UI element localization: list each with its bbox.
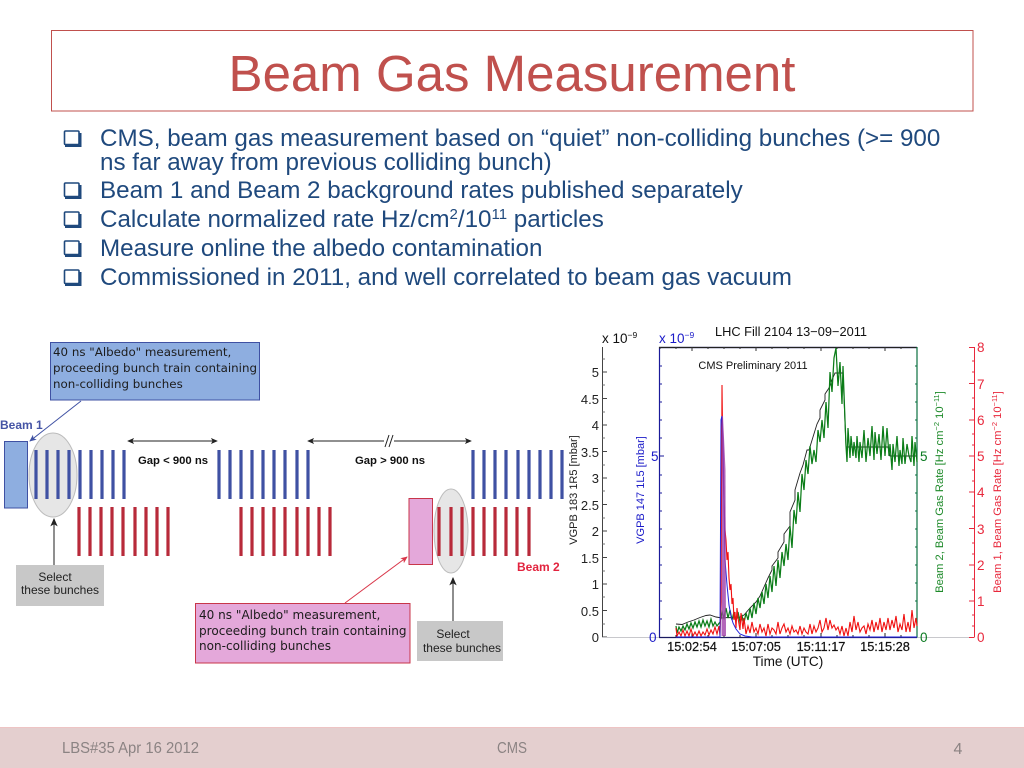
select box beam 2: [417, 621, 503, 661]
gap label over 900 ns: Gap > 900 ns: [355, 455, 425, 467]
bullet: normalized rate: 11: [491, 206, 507, 223]
gap arrow under 900 ns: [128, 440, 217, 442]
green axis labels: 10: [934, 406, 946, 422]
left axis: VGPB 183 1R5: 0.5: [581, 604, 599, 619]
green axis labels: −2: [932, 422, 941, 431]
green axis labels: Beam 2, Beam Gas Rate [Hz cm: [934, 431, 946, 593]
beam 2 albedo callout: 40 ns "Albedo" measurement,: [199, 608, 380, 622]
beam 2 bunches: [79, 507, 529, 556]
green axis labels: ]: [934, 391, 946, 394]
left axis: VGPB 183 1R5: [568, 330, 637, 645]
right axis: beam 1 rate: −11: [990, 394, 999, 406]
trace: red beam 1 rate: [676, 385, 917, 636]
beam 1 block: [4, 442, 28, 508]
footer band: 4: [954, 741, 963, 758]
trace: blue VGPB 147: [676, 416, 917, 637]
blue axis labels: −9: [685, 330, 694, 340]
time axis labels: 15:07:05: [731, 639, 781, 654]
bullet: commissioned: Commissioned in 2011, and well correlated to beam gas vacuum: [100, 264, 792, 291]
bullet list: [64, 125, 940, 291]
arrow: select beam 2 bunches: [452, 578, 454, 621]
bullet: quiet bunches: [64, 125, 940, 176]
right axis: beam 1 rate: 2: [977, 558, 985, 573]
bullet: normalized rate: Calculate normalized rate Hz/cm: [100, 206, 450, 233]
select box beam 2: these bunches: [423, 641, 501, 655]
annotation: CMS preliminary: CMS Preliminary 2011: [698, 360, 808, 372]
select box beam 2: Select: [436, 627, 470, 641]
right axis: beam 1 rate: 3: [977, 522, 985, 537]
beam 1 albedo callout: proceeding bunch train containing: [53, 361, 257, 375]
right axis: beam 1 rate: 0: [977, 630, 985, 645]
label: beam 2: Beam 2: [517, 560, 560, 574]
beam 1 albedo callout: non-colliding bunches: [53, 377, 183, 391]
right axis: beam 1 rate: 8: [977, 340, 985, 355]
select box beam 1: [16, 565, 104, 606]
bullet: separate rates: Beam 1 and Beam 2 background rates published separately: [100, 177, 744, 204]
green axis labels: [920, 391, 946, 645]
right axis: beam 1 rate: 5: [977, 449, 985, 464]
bullet: albedo: Measure online the albedo contamination: [100, 235, 542, 262]
time axis labels: 15:02:54: [667, 639, 717, 654]
trace: green beam 2 rate: [676, 348, 917, 633]
right axis: beam 1 rate: 6: [977, 413, 985, 428]
bunch train diagram: [0, 342, 562, 663]
left axis: VGPB 183 1R5: 3: [592, 471, 599, 486]
time axis labels: 15:15:28: [860, 639, 910, 654]
bullet: quiet bunches: CMS, beam gas measurement based on “quiet” non-colliding bunches (>= 900: [100, 125, 940, 152]
right axis: beam 1 rate: −2: [990, 422, 999, 431]
bullet: normalized rate: 2: [450, 206, 458, 223]
bullet: normalized rate: particles: [507, 206, 604, 233]
green axis labels: 0: [920, 630, 928, 645]
beam 2 block: [409, 498, 432, 564]
chart: LHC fill 2104: [568, 324, 1004, 669]
right axis: beam 1 rate: 4: [977, 485, 985, 500]
right axis: beam 1 rate: 10: [992, 406, 1004, 422]
plot frame: [659, 347, 917, 638]
right axis: beam 1 rate: ]: [992, 391, 1004, 394]
chart title: LHC Fill 2104 13−09−2011: [715, 324, 867, 339]
green axis labels: −11: [932, 394, 941, 406]
left axis: VGPB 183 1R5: 4.5: [581, 392, 599, 407]
beam 2 albedo callout: [196, 604, 410, 663]
time axis labels: Time (UTC): [753, 654, 823, 669]
right axis: beam 1 rate: 7: [977, 377, 985, 392]
blue axis labels: 0: [649, 630, 657, 645]
left axis: VGPB 183 1R5: 3.5: [581, 445, 599, 460]
bullet: normalized rate: /10: [458, 206, 491, 233]
selection ellipse beam 1: [29, 433, 77, 517]
select box beam 1: these bunches: [21, 583, 99, 597]
baseline connector: [602, 636, 974, 638]
left axis: VGPB 183 1R5: 1: [592, 577, 599, 592]
time axis labels: 15:11:17: [797, 639, 845, 654]
gap arrow over 900 ns: [308, 435, 471, 447]
beam 2 albedo callout: proceeding bunch train containing: [199, 624, 406, 638]
footer band: [0, 727, 1024, 768]
spike fill: overlap of traces: [722, 416, 726, 636]
beam 1 albedo callout: [50, 342, 260, 400]
blue axis labels: 5: [651, 449, 659, 464]
left axis: VGPB 183 1R5: 5: [592, 365, 599, 380]
left axis: VGPB 183 1R5: 2.5: [581, 498, 599, 513]
bullet: quiet bunches: ns far away from previous colliding bunch): [100, 149, 552, 176]
right axis: beam 1 rate: [969, 340, 1004, 645]
left axis: VGPB 183 1R5: 2: [592, 524, 599, 539]
blue axis labels: x 10: [659, 331, 685, 346]
time axis labels: [667, 639, 910, 669]
left axis: VGPB 183 1R5: 1.5: [581, 551, 599, 566]
right axis: beam 1 rate: 1: [977, 594, 985, 609]
gap label under 900 ns: Gap < 900 ns: [138, 455, 208, 467]
left axis: VGPB 183 1R5: 0: [592, 630, 599, 645]
arrow: callout to beam 2 block: [345, 557, 407, 603]
arrow: callout to beam 1 block: [30, 401, 81, 441]
left axis: VGPB 183 1R5: x 10: [602, 331, 628, 346]
left axis: VGPB 183 1R5: 4: [592, 418, 599, 433]
left axis: VGPB 183 1R5: VGPB 183 1R5 [mbar]: [568, 435, 580, 545]
blue axis labels: VGPB 147 1L5 [mbar]: [635, 436, 647, 544]
bullet: normalized rate: [64, 206, 604, 233]
arrow: select beam 1 bunches: [53, 519, 55, 565]
title: Beam Gas Measurement: [229, 45, 795, 102]
trace: black vacuum gauge: [676, 373, 917, 624]
green axis labels: 5: [920, 449, 928, 464]
right axis: beam 1 rate: Beam 1, Beam Gas Rate [Hz cm: [992, 431, 1004, 593]
footer band: LBS#35 Apr 16 2012: [62, 740, 199, 757]
beam 1 albedo callout: 40 ns "Albedo" measurement,: [53, 345, 231, 359]
blue axis labels: [635, 330, 694, 645]
beam 2 albedo callout: non-colliding bunches: [199, 639, 331, 653]
beam 1 bunches: [36, 450, 562, 499]
label: beam 1: Beam 1: [0, 418, 43, 432]
select box beam 1: Select: [38, 570, 72, 584]
footer band: CMS: [497, 740, 527, 757]
title: [52, 30, 973, 111]
selection ellipse beam 2: [434, 489, 468, 573]
left axis: VGPB 183 1R5: −9: [628, 330, 637, 340]
